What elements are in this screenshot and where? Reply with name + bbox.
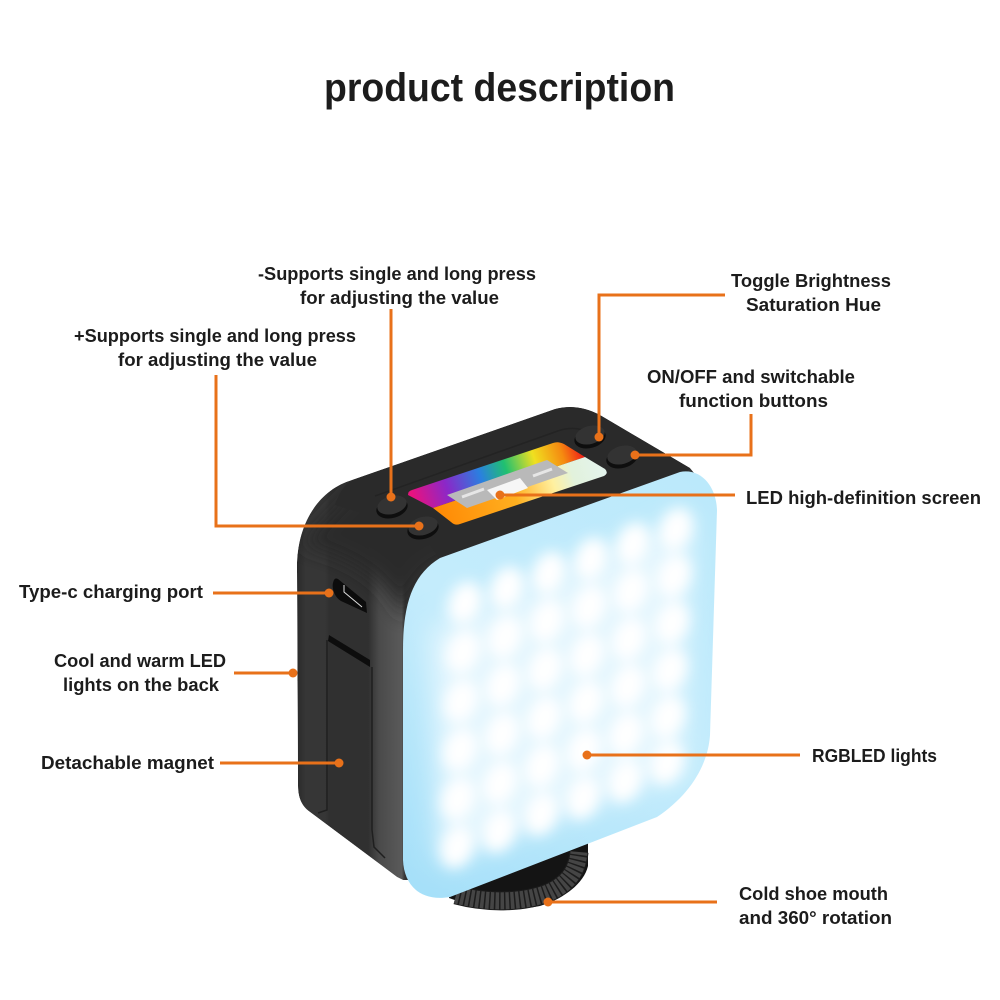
callout: type-c: Type-c charging port [19, 582, 203, 602]
callout: cold shoe: Cold shoe mouth [739, 884, 888, 904]
callout: back lights [54, 651, 298, 695]
LED dots [434, 503, 699, 873]
callout: toggle [594, 271, 891, 442]
title: product description [324, 66, 675, 110]
callout: back lights: lights on the back [63, 675, 220, 695]
callout: minus button: -Supports single and long press [258, 264, 536, 284]
callout: plus button: for adjusting the value [118, 350, 317, 370]
callout: minus button [258, 264, 536, 502]
callout: plus button: +Supports single and long press [74, 326, 356, 346]
callout: magnet [41, 753, 344, 773]
callout: toggle: Toggle Brightness [731, 271, 891, 291]
callout: on/off: function buttons [679, 391, 828, 411]
callout: minus button: for adjusting the value [300, 288, 499, 308]
device body [297, 407, 700, 880]
buttons [374, 422, 640, 543]
product: LED light [297, 407, 717, 909]
type-c port [333, 578, 367, 613]
callout: cold shoe [544, 884, 892, 928]
callout: on/off: ON/OFF and switchable [647, 367, 855, 387]
callout: toggle: Saturation Hue [746, 295, 881, 315]
callout: type-c [19, 582, 334, 602]
callout: RGB lights: RGBLED lights [812, 746, 937, 766]
RGB LED panel [403, 471, 717, 898]
callout: cold shoe: and 360° rotation [739, 908, 892, 928]
LED screen [408, 442, 607, 525]
callout: screen [496, 488, 981, 508]
callout: magnet: Detachable magnet [41, 753, 214, 773]
callout: screen: LED high-definition screen [746, 488, 981, 508]
callout: RGB lights [582, 746, 937, 766]
callout: back lights: Cool and warm LED [54, 651, 226, 671]
callout: plus button [74, 326, 424, 530]
cold shoe knob [449, 838, 588, 909]
callout: on/off [630, 367, 855, 460]
